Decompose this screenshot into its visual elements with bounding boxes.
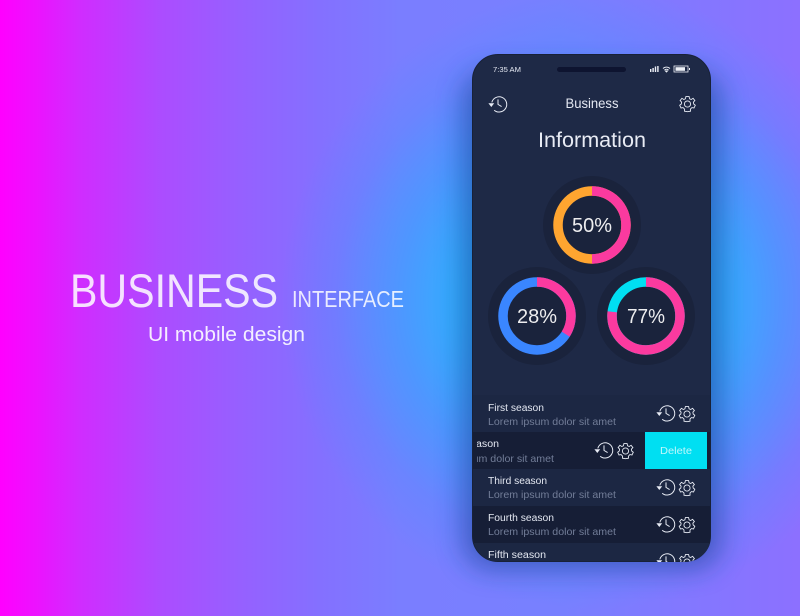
signal bars (650, 66, 659, 72)
donut chart: 50% (543, 176, 641, 274)
notch (557, 67, 626, 72)
delete button (645, 432, 707, 469)
clock: 7:35 AM (493, 65, 521, 74)
page heading: Information (538, 129, 646, 152)
list row: second season swiped: Second season (426, 439, 499, 450)
list row: first season (488, 404, 696, 427)
list row: fifth season (484, 543, 710, 562)
battery icon (674, 66, 690, 72)
icon: settings (680, 97, 695, 112)
list row: fourth season (473, 506, 710, 543)
list row: first season: Lorem ipsum dolor sit amet (488, 416, 616, 428)
heading: BUSINESS: BUSINESS (70, 264, 278, 317)
phone body (472, 54, 710, 562)
list row: third season: Third season (488, 476, 547, 487)
phone mockup (472, 54, 711, 562)
status bar (493, 65, 690, 74)
nav title: Business (566, 96, 619, 111)
wifi icon (663, 67, 670, 72)
donut chart: 77%: 77% (627, 306, 665, 328)
list row: fifth season: Fifth season (488, 550, 546, 561)
season list (473, 404, 710, 562)
main illustration (73, 54, 737, 585)
donut chart: 50%: 50% (572, 215, 612, 237)
title: business interface (70, 264, 404, 346)
subheading: UI mobile design (148, 324, 305, 346)
list row: fourth season: Lorem ipsum dolor sit amet (488, 526, 616, 538)
donut chart: 77% (597, 267, 695, 365)
heading: INTERFACE: INTERFACE (292, 286, 404, 312)
phone shadow (462, 70, 722, 570)
delete button: Delete (660, 445, 692, 457)
list row: third season: Lorem ipsum dolor sit amet (488, 489, 616, 501)
list row: second season swiped: Lorem ipsum dolor sit amet (426, 453, 554, 465)
donut chart: 28%: 28% (517, 306, 557, 328)
list row: first season: First season (488, 403, 544, 414)
donut chart: 28% (488, 267, 586, 365)
icon: history (488, 97, 507, 112)
list row: second season swiped (473, 432, 710, 469)
list row: fourth season: Fourth season (488, 513, 554, 524)
list row: third season (488, 476, 696, 500)
